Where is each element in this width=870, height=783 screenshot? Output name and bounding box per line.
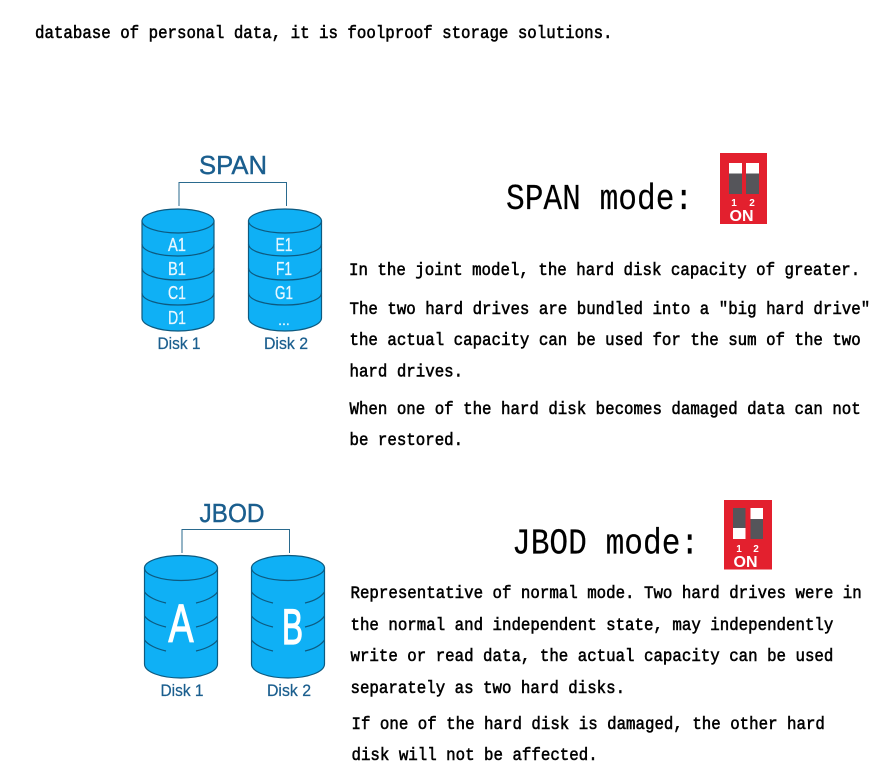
SPAN connector — [179, 182, 286, 206]
heading: JBOD mode: JBOD mode: — [512, 524, 699, 565]
SPAN disk 1: C1 — [168, 283, 186, 303]
JBOD disk labels — [160, 681, 311, 700]
text block: JBOD description — [350, 584, 862, 766]
SPAN disk labels: Disk 1 — [158, 334, 200, 353]
heading: SPAN mode: SPAN mode: — [506, 180, 693, 221]
text block: SPAN description: hard drives. — [350, 363, 463, 383]
SPAN disk 2 — [248, 209, 322, 331]
SPAN diagram — [142, 150, 322, 353]
JBOD disk 2: B — [282, 599, 303, 655]
SPAN disk 2: F1 — [276, 259, 292, 279]
JBOD disk 1: A — [168, 594, 194, 654]
text block: JBOD description: If one of the hard disk is damaged, the other hard — [352, 715, 825, 735]
JBOD disk 1 — [144, 556, 218, 678]
text block: JBOD description: write or read data, the actual capacity can be used — [350, 647, 833, 667]
SPAN disk 1: A1 — [168, 235, 186, 255]
text block: JBOD description: disk will not be affected. — [352, 746, 598, 766]
intro text: database of personal data, it is foolproof storage solutions. — [35, 24, 613, 44]
JBOD diagram title: JBOD — [200, 498, 264, 528]
text block: JBOD description: Representative of normal mode. Two hard drives were in — [350, 584, 862, 604]
SPAN disk labels — [158, 334, 308, 353]
text block: SPAN description: the actual capacity can be used for the sum of the two — [350, 331, 861, 351]
SPAN disk 2: ... — [278, 312, 290, 328]
text block: SPAN description: be restored. — [350, 431, 463, 451]
SPAN disk 1 — [142, 209, 214, 331]
text block: JBOD description: separately as two hard disks. — [350, 679, 625, 699]
SPAN disk 1: D1 — [168, 308, 186, 328]
text block: SPAN description: When one of the hard disk becomes damaged data can not — [350, 400, 861, 420]
SPAN disk 2: G1 — [275, 283, 293, 303]
icon: SPAN DIP switch: 2 — [749, 198, 755, 209]
JBOD disk labels: Disk 1 — [160, 681, 204, 700]
JBOD disk 2 — [252, 556, 324, 678]
text block: SPAN description: In the joint model, the hard disk capacity of greater. — [349, 261, 860, 281]
text block: SPAN description: The two hard drives are bundled into a "big hard drive" — [350, 300, 870, 320]
icon: JBOD DIP switch: 1 — [736, 544, 742, 555]
SPAN disk 1: B1 — [168, 259, 186, 279]
JBOD disk labels: Disk 2 — [267, 681, 311, 700]
icon: JBOD DIP switch — [724, 500, 772, 571]
text block: SPAN description — [349, 261, 870, 451]
text block: JBOD description: the normal and independent state, may independently — [350, 616, 833, 636]
SPAN diagram title: SPAN — [199, 150, 267, 180]
JBOD diagram — [144, 498, 324, 700]
icon: JBOD DIP switch: 2 — [753, 544, 759, 555]
icon: JBOD DIP switch: ON — [734, 554, 758, 571]
icon: SPAN DIP switch — [720, 153, 767, 225]
SPAN disk 2: E1 — [276, 235, 292, 255]
icon: SPAN DIP switch: 1 — [731, 198, 737, 209]
icon: SPAN DIP switch: ON — [730, 208, 754, 225]
JBOD connector — [182, 530, 290, 553]
SPAN disk labels: Disk 2 — [264, 334, 308, 353]
